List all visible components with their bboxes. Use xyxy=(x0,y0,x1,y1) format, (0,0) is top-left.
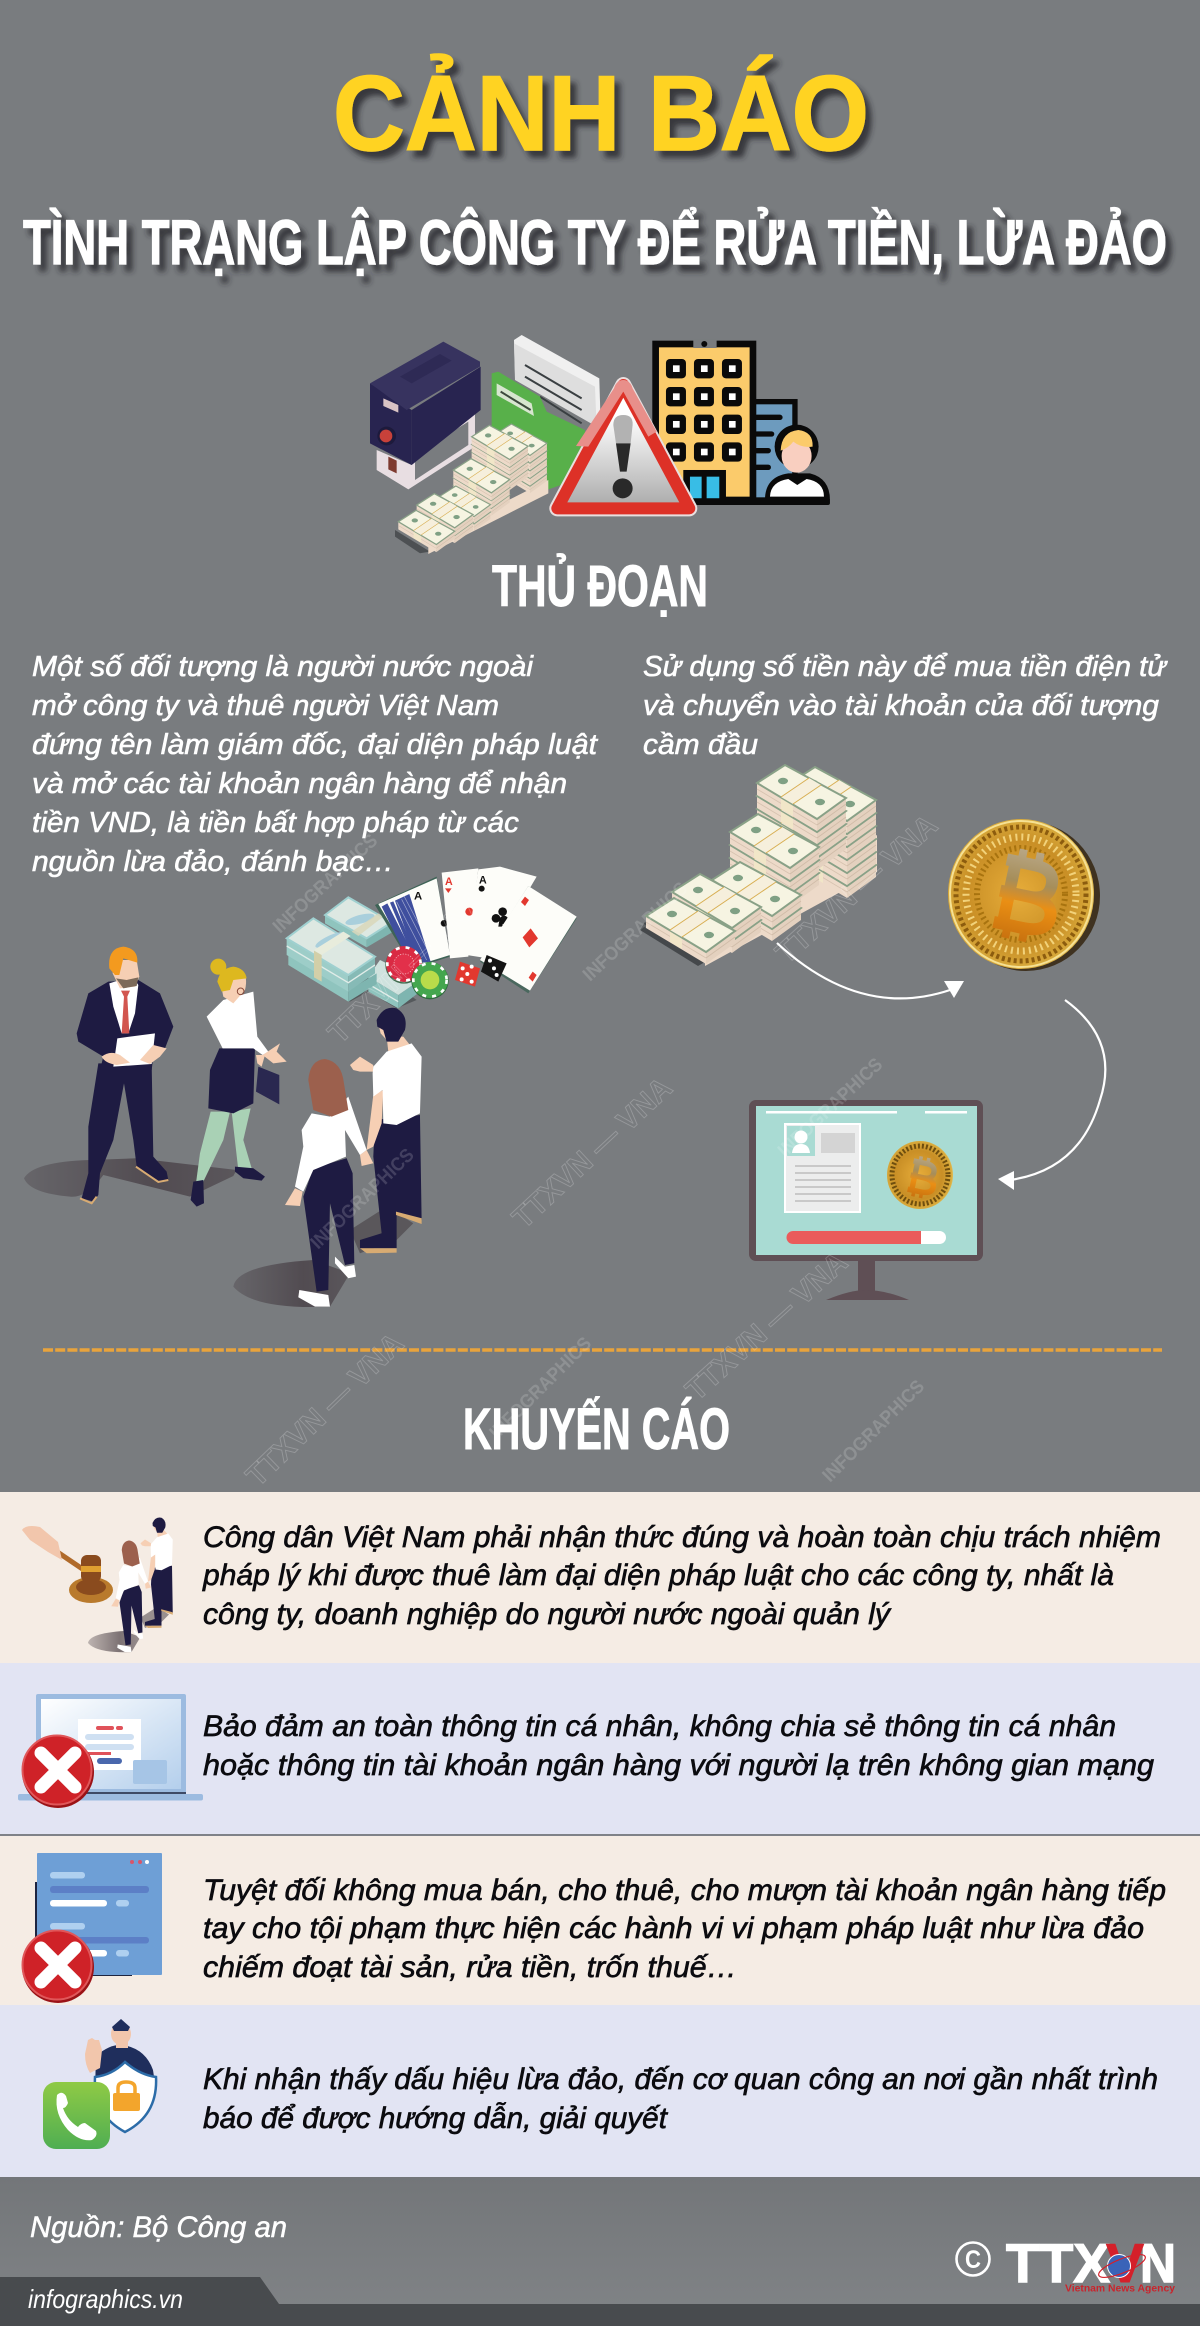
infographic page: INFOGRAPHICS xyxy=(486,1333,596,1444)
text: hoặc thông tin tài khoản ngân hàng với người lạ trên không gian mạng xyxy=(203,1749,1154,1782)
text: Công dân Việt Nam phải nhận thức đúng và hoàn toàn chịu trách nhiệm xyxy=(203,1521,1161,1554)
icon: stamp xyxy=(370,342,481,489)
icon: bitcoin coin xyxy=(948,819,1100,971)
heading: THỦ ĐOẠN: THỦ ĐOẠN xyxy=(492,554,708,619)
text block: left method: đứng tên làm giám đốc, đại diện pháp luật xyxy=(32,729,599,761)
dice xyxy=(455,955,507,987)
text xyxy=(203,2063,1158,2135)
illustration: money stacks xyxy=(640,765,877,966)
logo: TTXVN: TTX xyxy=(1006,2232,1110,2294)
diamond ace card xyxy=(480,886,577,993)
illustration: suited man xyxy=(24,947,237,1203)
text: pháp lý khi được thuê làm đại diện pháp luật cho các công ty, nhất là xyxy=(202,1559,1114,1592)
infographic page: TTXVN — VNA xyxy=(322,884,492,1050)
panel: recommendation 4 xyxy=(0,2005,1200,2177)
text block: left method: mở công ty và thuê người Việt Nam xyxy=(32,690,499,722)
text: chiếm đoạt tài sản, rửa tiền, trốn thuế… xyxy=(203,1951,737,1984)
icon: laptop with cross xyxy=(18,1694,203,1808)
illustration: couple seen from behind xyxy=(233,1008,422,1307)
panel: recommendation 2 xyxy=(0,1663,1200,1836)
front pack xyxy=(287,918,377,1002)
icon: folder with papers xyxy=(492,335,601,490)
panel: recommendation 3 xyxy=(0,1836,1200,2005)
panel: recommendation 1 xyxy=(0,1492,1200,1663)
text block: right method: Sử dụng số tiền này để mua tiền điện tử xyxy=(643,651,1169,683)
infographic page: INFOGRAPHICS xyxy=(579,878,692,986)
illustration: green cash stacks xyxy=(287,867,577,1008)
website: infographics.vn xyxy=(28,2284,183,2314)
icon: yellow building xyxy=(656,340,830,505)
text: công ty, doanh nghiệp do người nước ngoài quản lý xyxy=(203,1598,892,1631)
text: tay cho tội phạm thực hiện các hành vi vi phạm pháp luật như lừa đảo xyxy=(203,1912,1144,1945)
icon: account page with cross xyxy=(22,1853,162,2003)
icon group: stamp, folder, money, warning, building xyxy=(370,335,830,554)
text block: right method: và chuyển vào tài khoản của đối tượng xyxy=(643,690,1159,722)
icon: gavel and couple xyxy=(22,1517,173,1652)
club ace card xyxy=(467,867,537,958)
logo: TTXVN: V xyxy=(1106,2232,1144,2294)
infographic page: INFOGRAPHICS xyxy=(774,1054,887,1162)
illustration: monitor with account xyxy=(749,1100,983,1300)
text block: left method: nguồn lừa đảo, đánh bạc… xyxy=(32,846,394,878)
blue-backed card xyxy=(375,877,450,968)
blue-backed card: A xyxy=(414,890,422,902)
back pack xyxy=(325,897,393,947)
club ace card: A xyxy=(479,874,487,886)
infographic page: TTXVN — VNA xyxy=(240,1327,410,1493)
text xyxy=(203,1874,1166,1984)
text block: right method: cầm đầu xyxy=(643,729,758,761)
text block: right method xyxy=(643,651,1169,761)
source: Nguồn: Bộ Công an xyxy=(30,2211,287,2244)
illustration: woman with briefcase xyxy=(191,959,287,1207)
infographic page: INFOGRAPHICS xyxy=(269,830,382,938)
text xyxy=(202,1521,1161,1631)
footer xyxy=(0,2177,1200,2326)
text block: left method: Một số đối tượng là người nước ngoài xyxy=(32,651,535,683)
green chip xyxy=(411,962,449,999)
arrow: coin to monitor xyxy=(998,1000,1105,1190)
text block: left method: tiền VND, là tiền bất hợp pháp từ các xyxy=(32,807,520,839)
infographic page: TTXVN — VNA xyxy=(506,1071,679,1235)
icon: money stacks xyxy=(395,424,548,554)
text block: left method xyxy=(32,651,599,878)
title: CẢNH BÁO: CẢNH BÁO xyxy=(333,53,869,173)
infographic page: INFOGRAPHICS xyxy=(819,1376,929,1487)
text: Tuyệt đối không mua bán, cho thuê, cho mượn tài khoản ngân hàng tiếp xyxy=(203,1874,1166,1907)
red chip xyxy=(385,946,423,984)
text block: left method: và mở các tài khoản ngân hàng để nhận xyxy=(32,768,567,800)
infographic page: TTXVN — VNA xyxy=(680,1246,854,1407)
logo: TTXVN: C xyxy=(965,2246,981,2274)
red ace card xyxy=(442,868,478,958)
divider: dashed line xyxy=(43,1348,1162,1352)
icon: police, shield and phone xyxy=(43,2019,156,2149)
logo: TTXVN: N xyxy=(1140,2232,1176,2294)
arrow: money to coin xyxy=(777,943,964,998)
heading: KHUYẾN CÁO: KHUYẾN CÁO xyxy=(463,1397,730,1462)
logo: TTXVN: Vietnam News Agency xyxy=(1065,2282,1175,2294)
infographic page: INFOGRAPHICS xyxy=(307,1145,419,1254)
red ace card: A xyxy=(445,876,453,888)
text: báo để được hướng dẫn, giải quyết xyxy=(203,2102,669,2135)
text xyxy=(203,1710,1154,1782)
logo: TTXVN xyxy=(956,2232,1176,2294)
text: Bảo đảm an toàn thông tin cá nhân, không chia sẻ thông tin cá nhân xyxy=(203,1710,1116,1743)
icon: warning triangle xyxy=(557,380,689,508)
icon: person xyxy=(765,425,830,500)
lower right pack xyxy=(368,960,420,1008)
icon: blue building xyxy=(753,402,795,500)
text: Khi nhận thấy dấu hiệu lừa đảo, đến cơ quan công an nơi gần nhất trình xyxy=(203,2063,1158,2096)
infographic page: TTXVN — VNA xyxy=(770,809,944,970)
